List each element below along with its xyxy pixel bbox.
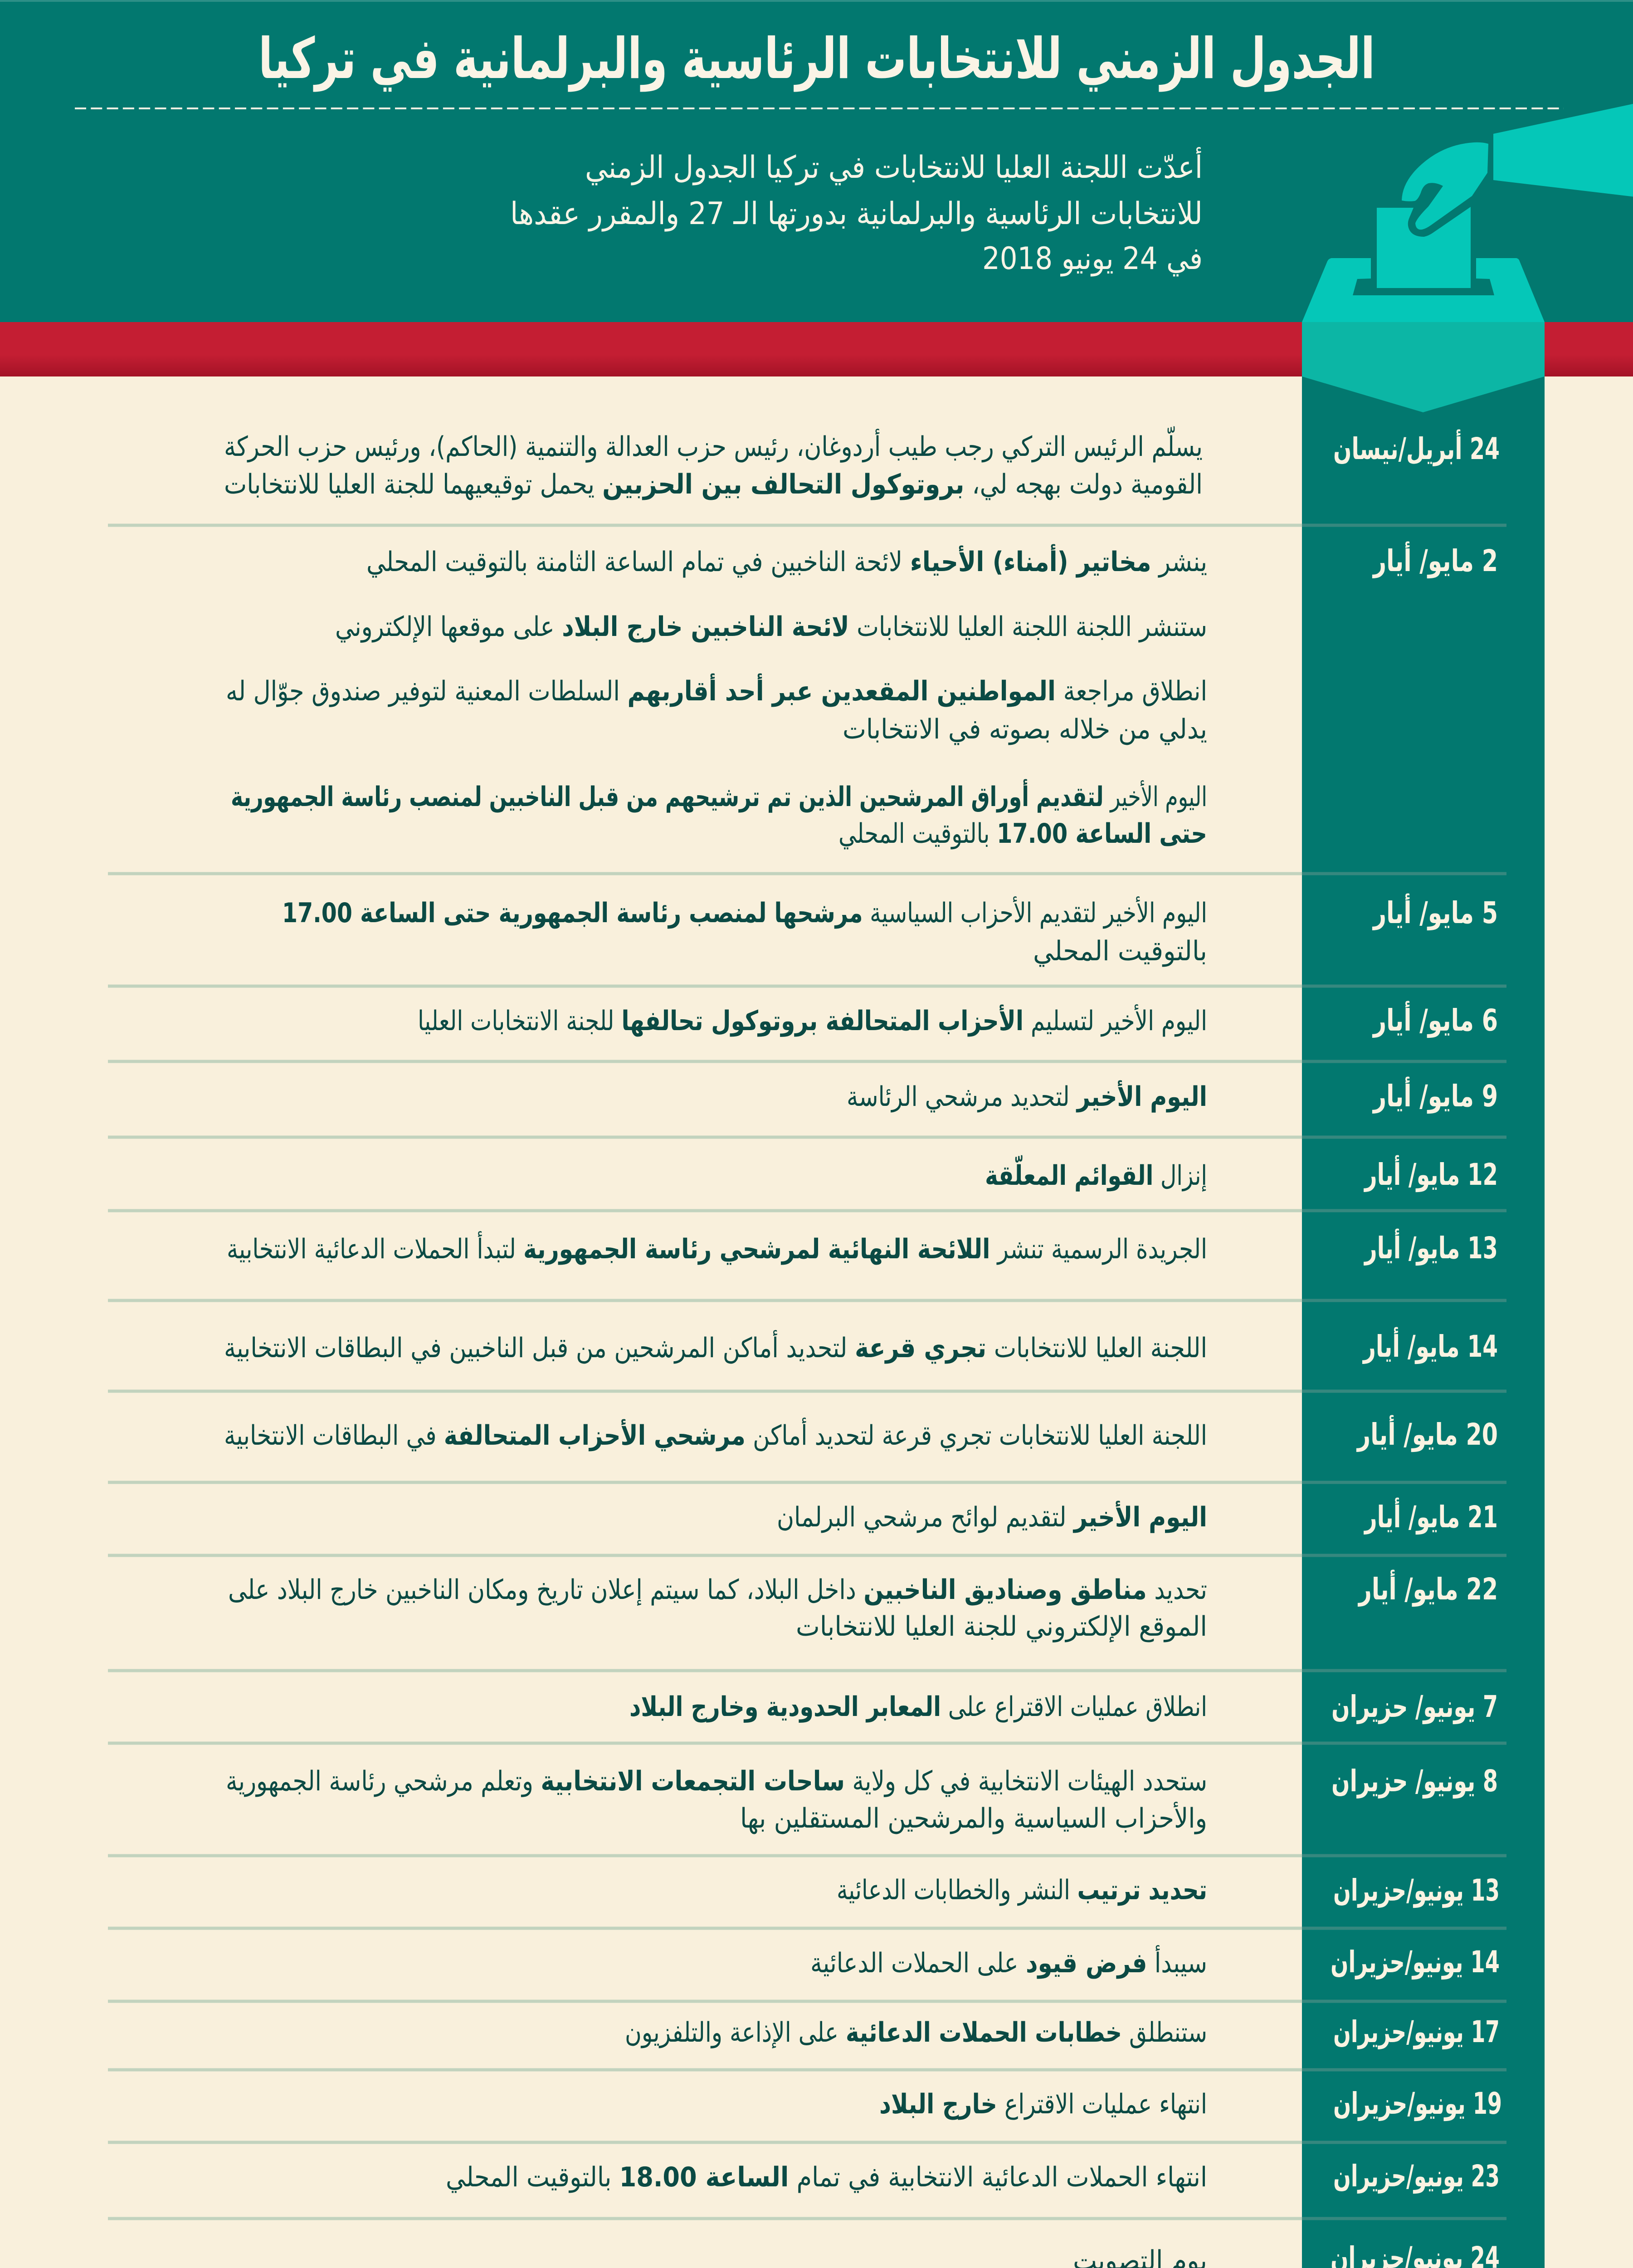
date: 13 مايو/ أيار [1364, 1228, 1498, 1266]
event text: القومية دولت بهجه لي، بروتوكول التحالف بين الحزبين يحمل توقيعيهما للجنة العليا للانتخابات [224, 469, 1203, 500]
event text: اليوم الأخير لتقديم أوراق المرشحين الذين تم ترشيحهم من قبل الناخبين لمنصب رئاسة الجمهورية [231, 779, 1207, 813]
header panel [0, 0, 1633, 322]
event text: اليوم الأخير لتقديم لوائح مرشحي البرلمان [777, 1501, 1207, 1533]
event text: يدلي من خلاله بصوته في الانتخابات [843, 714, 1207, 745]
event text [226, 544, 1207, 850]
row: 13 June [837, 1873, 1500, 1908]
date: 17 يونيو/حزيران [1333, 2014, 1500, 2050]
event text [282, 896, 1207, 967]
date: 5 مايو/ أيار [1372, 893, 1498, 931]
event text: سيبدأ فرض قيود على الحملات الدعائية [810, 1945, 1207, 1979]
event text: اللجنة العليا للانتخابات تجري قرعة لتحديد أماكن المرشحين من قبل الناخبين في البطاقات الانتخابية [224, 1330, 1207, 1364]
event text: اليوم الأخير لتسليم الأحزاب المتحالفة بروتوكول تحالفها للجنة الانتخابات العليا [418, 1004, 1207, 1037]
row: 7 June [629, 1689, 1498, 1725]
date: 13 يونيو/حزيران [1333, 1873, 1500, 1908]
event text: والأحزاب السياسية والمرشحين المستقلين بها [740, 1802, 1207, 1834]
event text [224, 426, 1203, 500]
event text: انتهاء عمليات الاقتراع خارج البلاد [879, 2088, 1207, 2120]
event text [228, 1574, 1207, 1642]
event text: ستحدد الهيئات الانتخابية في كل ولاية ساحات التجمعات الانتخابية وتعلم مرشحي رئاسة الجمهورية [226, 1765, 1207, 1797]
event text: الموقع الإلكتروني للجنة العليا للانتخابات [796, 1611, 1207, 1642]
row: 19 June [879, 2086, 1502, 2121]
date: 24 أبريل/نيسان [1333, 429, 1500, 466]
red band [0, 322, 1633, 376]
date: 9 مايو/ أيار [1372, 1076, 1498, 1114]
event text: انطلاق مراجعة المواطنين المقعدين عبر أحد أقاربهم السلطات المعنية لتوفير صندوق جوّال له [226, 673, 1207, 707]
date: 6 مايو/ أيار [1372, 1001, 1498, 1038]
event text: انطلاق عمليات الاقتراع على المعابر الحدودية وخارج البلاد [629, 1691, 1207, 1723]
date: 22 مايو/ أيار [1358, 1569, 1498, 1607]
row: 24 June [1073, 2240, 1500, 2268]
date: 14 مايو/ أيار [1362, 1327, 1498, 1364]
intro text: أعدّت اللجنة العليا للانتخابات في تركيا الجدول الزمني [585, 147, 1203, 186]
row: 22 May [228, 1569, 1498, 1642]
date: 21 مايو/ أيار [1364, 1497, 1498, 1535]
row: 21 May [777, 1497, 1498, 1535]
event text: إنزال القوائم المعلّقة [985, 1155, 1207, 1192]
row: 17 June [625, 2014, 1500, 2050]
event text: ستنطلق خطابات الحملات الدعائية على الإذاعة والتلفزيون [625, 2017, 1207, 2048]
event text: حتى الساعة 17.00 بالتوقيت المحلي [838, 818, 1207, 850]
intro text: للانتخابات الرئاسية والبرلمانية بدورتها الـ 27 والمقرر عقدها [510, 196, 1203, 232]
event text: اليوم الأخير لتقديم الأحزاب السياسية مرشحها لمنصب رئاسة الجمهورية حتى الساعة 17.00 [282, 896, 1207, 929]
event text: اللجنة العليا للانتخابات تجري قرعة لتحديد أماكن مرشحي الأحزاب المتحالفة في البطاقات الانتخابية [224, 1418, 1207, 1452]
event text: تحديد مناطق وصناديق الناخبين داخل البلاد، كما سيتم إعلان تاريخ ومكان الناخبين خارج البلاد على [228, 1574, 1207, 1606]
event text: اليوم الأخير لتحديد مرشحي الرئاسة [847, 1080, 1207, 1113]
row: 24 April [224, 426, 1500, 500]
intro text [510, 147, 1203, 277]
event text: تحديد ترتيب النشر والخطابات الدعائية [837, 1874, 1207, 1906]
event text: ينشر مخاتير (أمناء) الأحياء لائحة الناخبين في تمام الساعة الثامنة بالتوقيت المحلي [366, 544, 1207, 578]
row: 9 May [847, 1076, 1498, 1114]
date: 19 يونيو/حزيران [1333, 2086, 1502, 2121]
date: 8 يونيو/ حزيران [1331, 1764, 1498, 1799]
row: 14 June [810, 1945, 1500, 1980]
row: 8 June [226, 1764, 1498, 1834]
event text: الجريدة الرسمية تنشر اللائحة النهائية لمرشحي رئاسة الجمهورية لتبدأ الحملات الدعائية الانتخابية [227, 1231, 1207, 1265]
date: 20 مايو/ أيار [1356, 1415, 1498, 1452]
date: 12 مايو/ أيار [1364, 1155, 1498, 1193]
event text [226, 1765, 1207, 1834]
row: 12 May [985, 1155, 1498, 1193]
event text: بالتوقيت المحلي [1033, 935, 1207, 967]
row: 2 May [226, 541, 1498, 850]
row: 6 May [418, 1001, 1498, 1038]
row: 13 May [227, 1228, 1498, 1266]
row: 20 May [224, 1415, 1498, 1452]
date: 7 يونيو/ حزيران [1331, 1689, 1498, 1725]
date: 14 يونيو/حزيران [1331, 1945, 1500, 1980]
row: 23 June [446, 2159, 1500, 2194]
timeline column [1302, 376, 1545, 2268]
event text: يسلّم الرئيس التركي رجب طيب أردوغان، رئيس حزب العدالة والتنمية (الحاكم)، ورئيس حزب الحركة [224, 426, 1203, 463]
event text: ستنشر اللجنة اللجنة العليا للانتخابات لائحة الناخبين خارج البلاد على موقعها الإلكتروني [335, 611, 1207, 643]
row: 5 May [282, 893, 1498, 967]
date: 23 يونيو/حزيران [1333, 2159, 1500, 2194]
intro text: في 24 يونيو 2018 [982, 241, 1203, 277]
row: 14 May [224, 1327, 1498, 1364]
icon: ballot box and hand [1302, 104, 1633, 412]
date: 2 مايو/ أيار [1372, 541, 1498, 579]
event text: انتهاء الحملات الدعائية الانتخابية في تمام الساعة 18.00 بالتوقيت المحلي [446, 2161, 1207, 2193]
